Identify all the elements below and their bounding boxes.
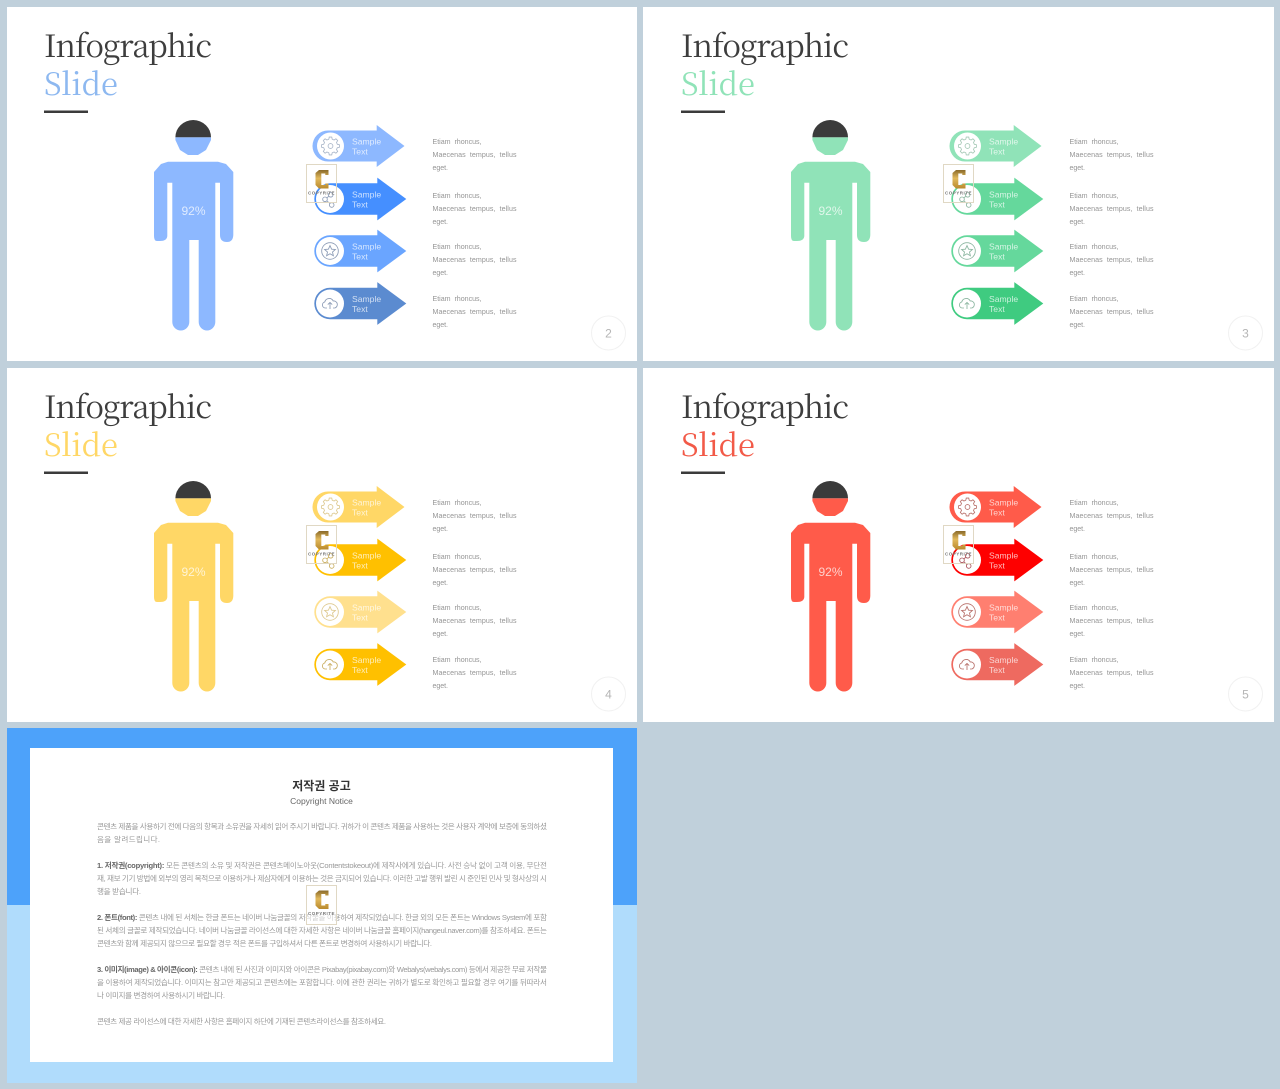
heading: green slide title bbox=[681, 21, 849, 113]
figure: yellow person 92% bbox=[154, 481, 233, 692]
arrow: blue cloud bbox=[314, 282, 406, 325]
figure: green person 92%: 92% bbox=[818, 204, 843, 218]
arrow: green star bbox=[951, 230, 1043, 272]
text block: green descriptions: Maecenas tempus, tellus bbox=[1070, 256, 1154, 264]
text block: notice intro: 음을 알려드립니다. bbox=[97, 834, 160, 844]
figure: green person 92% bbox=[791, 120, 870, 331]
text block: yellow descriptions: Etiam rhoncus, bbox=[432, 553, 482, 561]
text block: red descriptions bbox=[1070, 499, 1154, 690]
text block: red descriptions: Etiam rhoncus, bbox=[1070, 604, 1119, 612]
text block: copyright clause bbox=[97, 860, 547, 896]
text block: yellow descriptions: Etiam rhoncus, bbox=[432, 656, 482, 664]
text block: yellow descriptions: eget. bbox=[432, 682, 448, 690]
text block: blue descriptions bbox=[432, 138, 517, 329]
text block: font clause: 콘텐츠와 함께 제공되지 않으므로 필요할 경우 적은 폰트를 구입하셔서 다른 폰트로 변경하여 사용하시기 바랍니다. bbox=[97, 938, 432, 948]
text block: blue descriptions: Etiam rhoncus, bbox=[432, 243, 482, 251]
watermark: blue slide bbox=[306, 164, 336, 202]
text block: green descriptions: Maecenas tempus, tellus bbox=[1070, 308, 1154, 316]
text block: red descriptions: Maecenas tempus, tellus bbox=[1070, 512, 1154, 520]
watermark: red slide: COPYRITE bbox=[945, 552, 972, 556]
text block: blue descriptions: Etiam rhoncus, bbox=[432, 192, 482, 200]
text block: image and icon clause: 3. 이미지(image) & 아이콘(icon): 콘텐츠 내에 된 사진과 이미지와 아이콘은 Pixabay(pixabay.com)와 Webalys(webalys.com) 등에서 제공한 무료 저작물 bbox=[97, 964, 547, 974]
text block: image and icon clause bbox=[97, 964, 547, 1000]
text block: yellow descriptions: Etiam rhoncus, bbox=[432, 604, 482, 612]
text block: blue descriptions: eget. bbox=[432, 321, 448, 329]
text block: red descriptions: eget. bbox=[1070, 579, 1085, 587]
text block: green descriptions: eget. bbox=[1070, 269, 1085, 277]
page number: 4: 4 bbox=[605, 688, 612, 702]
text block: image and icon clause: 나 이미지를 변경하여 사용하시기 바랍니다. bbox=[97, 990, 225, 1000]
arrow: green cloud: Sample bbox=[989, 294, 1018, 304]
text block: license note: 콘텐츠 제공 라이선스에 대한 자세한 사항은 홈페이지 하단에 기재된 콘텐츠라이선스를 참조하세요. bbox=[97, 1016, 386, 1026]
arrow: yellow gear: Sample bbox=[352, 498, 381, 508]
heading: copyright notice title: Copyright Notice bbox=[290, 796, 353, 806]
watermark: copyright notice bbox=[306, 886, 336, 924]
text block: red descriptions: eget. bbox=[1070, 525, 1085, 533]
text block: red descriptions: eget. bbox=[1070, 682, 1085, 690]
arrow: red cloud bbox=[951, 643, 1043, 686]
page number: 3: 3 bbox=[1242, 326, 1249, 340]
panel: green slide bbox=[643, 7, 1274, 361]
arrow: blue cloud: Text bbox=[352, 304, 368, 314]
text block: image and icon clause: 을 이용하여 제작되었습니다. 이미지는 참고만 제공되고 콘텐츠에는 포함합니다. 이에 관한 권리는 귀하가 별도로 확인하고 필요할 경우 여기를 뒤따라서 bbox=[97, 977, 547, 987]
text block: red descriptions: Maecenas tempus, tellus bbox=[1070, 566, 1154, 574]
text block: blue descriptions: Maecenas tempus, tellus bbox=[432, 205, 517, 213]
text block: green descriptions: eget. bbox=[1070, 218, 1085, 226]
watermark: green slide bbox=[944, 164, 974, 202]
text block: copyright clause: 1. 저작권(copyright): 모든 콘텐츠의 소유 및 저작권은 콘텐츠메이노아웃(Contentstokeout)에 제작사에게 있습니다. 사전 승낙 없이 고객 이용, 무단전 bbox=[97, 860, 547, 870]
arrow: red cloud: Text bbox=[989, 665, 1005, 675]
arrow: yellow star: Text bbox=[352, 612, 368, 622]
text block: blue descriptions: Maecenas tempus, tellus bbox=[432, 256, 517, 264]
text block: green descriptions: Maecenas tempus, tellus bbox=[1070, 151, 1154, 159]
text block: copyright clause: 행을 받습니다. bbox=[97, 886, 141, 896]
arrow: yellow cloud: Sample bbox=[352, 655, 381, 665]
figure: blue person 92%: 92% bbox=[181, 204, 206, 218]
figure: yellow person 92%: 92% bbox=[181, 565, 206, 579]
arrow: blue share: Text bbox=[352, 200, 368, 210]
text block: yellow descriptions bbox=[432, 499, 517, 690]
text block: yellow descriptions: Maecenas tempus, tellus bbox=[432, 669, 517, 677]
arrow: yellow share: Sample bbox=[352, 550, 381, 560]
page number: 2 bbox=[592, 316, 626, 350]
page number: 5 bbox=[1228, 677, 1262, 711]
text block: blue descriptions: eget. bbox=[432, 269, 448, 277]
arrow: blue share bbox=[314, 178, 406, 220]
text block: yellow descriptions: eget. bbox=[432, 525, 448, 533]
arrow: red share: Sample bbox=[989, 550, 1018, 560]
text block: yellow descriptions: Maecenas tempus, tellus bbox=[432, 617, 517, 625]
heading: green slide title: Slide bbox=[681, 59, 755, 104]
arrow: green cloud bbox=[951, 282, 1043, 325]
heading: red slide title: Infographic bbox=[681, 382, 849, 427]
text block: blue descriptions: eget. bbox=[432, 164, 448, 172]
text block: red descriptions: Etiam rhoncus, bbox=[1070, 656, 1119, 664]
text block: blue descriptions: Maecenas tempus, tellus bbox=[432, 308, 517, 316]
text block: blue descriptions: Etiam rhoncus, bbox=[432, 138, 482, 146]
text block: blue descriptions: Maecenas tempus, tellus bbox=[432, 151, 517, 159]
arrow: yellow share bbox=[314, 539, 406, 581]
arrow: green star: Sample bbox=[989, 242, 1018, 252]
arrow: blue star: Text bbox=[352, 252, 368, 262]
figure: blue person 92% bbox=[154, 120, 233, 331]
text block: red descriptions: Etiam rhoncus, bbox=[1070, 499, 1119, 507]
watermark: red slide bbox=[944, 526, 974, 564]
text block: font clause: 된 서체의 글꼴로 제작되었습니다. 네이버 나눔글꼴 라이선스에 대한 자세한 사항은 네이버 나눔글꼴 홈페이지(hangeul.naver.com)를 참조하세요. 폰트는 bbox=[97, 925, 547, 935]
heading: blue slide title: Infographic bbox=[44, 21, 212, 66]
text block: green descriptions: Etiam rhoncus, bbox=[1070, 295, 1119, 303]
page number: 4 bbox=[592, 677, 626, 711]
arrow: red cloud: Sample bbox=[989, 655, 1018, 665]
arrow: blue gear bbox=[312, 125, 404, 167]
arrow: yellow star bbox=[314, 591, 406, 633]
arrow: blue share: Sample bbox=[352, 190, 381, 200]
text block: red descriptions: eget. bbox=[1070, 630, 1085, 638]
heading: copyright notice title: 저작권 공고 bbox=[292, 778, 351, 793]
panel: red slide bbox=[643, 368, 1274, 722]
arrow: blue star bbox=[314, 230, 406, 272]
text block: green descriptions: Etiam rhoncus, bbox=[1070, 192, 1119, 200]
watermark: blue slide: COPYRITE bbox=[308, 190, 335, 196]
page number: 5: 5 bbox=[1242, 688, 1249, 702]
arrow: yellow star: Sample bbox=[352, 602, 381, 612]
panel: blue slide bbox=[7, 7, 637, 361]
text block: green descriptions: Etiam rhoncus, bbox=[1070, 243, 1119, 251]
text block: green descriptions: eget. bbox=[1070, 321, 1085, 329]
heading: red slide title: Slide bbox=[681, 420, 755, 465]
arrow: red star: Sample bbox=[989, 602, 1018, 612]
heading: blue slide title: Slide bbox=[44, 59, 118, 104]
arrow: green share bbox=[951, 178, 1043, 220]
text block: notice intro: 콘텐츠 제품을 사용하기 전에 다음의 항목과 소유권을 자세히 읽어 주시기 바랍니다. 귀하가 이 콘텐츠 제품을 사용하는 것은 사용자 계약에 보증에 동의하셨 bbox=[97, 821, 547, 831]
text block: blue descriptions: eget. bbox=[432, 218, 448, 226]
arrow: green gear bbox=[950, 125, 1042, 167]
text block: green descriptions: Etiam rhoncus, bbox=[1070, 138, 1119, 146]
text block: green descriptions bbox=[1070, 138, 1154, 329]
heading: copyright notice title bbox=[290, 778, 353, 806]
heading: green slide title: Infographic bbox=[681, 21, 849, 66]
arrow: green share: Sample bbox=[989, 190, 1018, 200]
arrow: green share: Text bbox=[989, 200, 1005, 210]
text block: font clause: 2. 폰트(font): 콘텐츠 내에 된 서체는 한글 폰트는 네이버 나눔글꼴의 저작물을 이용하여 제작되었습니다. 한글 외의 모든 폰트는 Windows System에 포함 bbox=[97, 912, 547, 922]
arrow: green gear: Text bbox=[989, 146, 1005, 156]
watermark: green slide: COPYRITE bbox=[945, 190, 972, 196]
arrow: red star bbox=[951, 591, 1043, 633]
arrow: blue star: Sample bbox=[352, 242, 381, 252]
text block: notice intro bbox=[97, 821, 547, 844]
arrow: red gear: Text bbox=[989, 508, 1005, 518]
arrow: red star: Text bbox=[989, 612, 1005, 622]
heading: yellow slide title bbox=[44, 382, 212, 474]
arrow: blue gear: Sample bbox=[352, 136, 381, 146]
text block: blue descriptions: Etiam rhoncus, bbox=[432, 295, 482, 303]
figure: red person 92% bbox=[791, 481, 870, 692]
arrow: red share bbox=[951, 539, 1043, 581]
heading: red slide title bbox=[681, 382, 849, 474]
heading: yellow slide title: Infographic bbox=[44, 382, 212, 427]
arrow: yellow gear bbox=[312, 486, 404, 528]
text block: copyright clause: 재, 재보 기기 방법에 외부의 영리 목적으로 이용하거나 제삼자에게 이용하는 것은 금지되어 있습니다. 이러한 고발 행위 발린 시 준인된 민사 및 형사상의 시 bbox=[97, 873, 547, 883]
text block: red descriptions: Etiam rhoncus, bbox=[1070, 553, 1119, 561]
text block: yellow descriptions: Maecenas tempus, tellus bbox=[432, 512, 517, 520]
heading: yellow slide title: Slide bbox=[44, 420, 118, 465]
arrow: red gear: Sample bbox=[989, 498, 1018, 508]
heading: blue slide title bbox=[44, 21, 212, 113]
arrow: blue cloud: Sample bbox=[352, 294, 381, 304]
text block: yellow descriptions: eget. bbox=[432, 579, 448, 587]
arrow: green star: Text bbox=[989, 252, 1005, 262]
text block: green descriptions: eget. bbox=[1070, 164, 1085, 172]
watermark: copyright notice: COPYRITE bbox=[308, 911, 335, 916]
watermark: yellow slide bbox=[306, 526, 336, 564]
arrow: yellow cloud: Text bbox=[352, 665, 368, 675]
arrow: red share: Text bbox=[989, 560, 1005, 570]
arrow: yellow share: Text bbox=[352, 560, 368, 570]
page number: 2: 2 bbox=[605, 326, 612, 340]
panel: copyright notice bbox=[7, 728, 637, 1083]
text block: yellow descriptions: eget. bbox=[432, 630, 448, 638]
panel: yellow slide bbox=[7, 368, 637, 722]
watermark: yellow slide: COPYRITE bbox=[308, 552, 335, 556]
text block: red descriptions: Maecenas tempus, tellus bbox=[1070, 669, 1154, 677]
page number: 3 bbox=[1228, 316, 1262, 350]
text block: yellow descriptions: Etiam rhoncus, bbox=[432, 499, 482, 507]
arrow: yellow cloud bbox=[314, 643, 406, 686]
text block: green descriptions: Maecenas tempus, tellus bbox=[1070, 205, 1154, 213]
text block: yellow descriptions: Maecenas tempus, tellus bbox=[432, 566, 517, 574]
figure: red person 92%: 92% bbox=[818, 565, 843, 579]
arrow: green gear: Sample bbox=[989, 136, 1018, 146]
arrow: blue gear: Text bbox=[352, 146, 368, 156]
arrow: green cloud: Text bbox=[989, 304, 1005, 314]
text block: font clause bbox=[97, 912, 547, 948]
arrow: yellow gear: Text bbox=[352, 508, 368, 518]
text block: red descriptions: Maecenas tempus, tellus bbox=[1070, 617, 1154, 625]
arrow: red gear bbox=[950, 486, 1042, 528]
